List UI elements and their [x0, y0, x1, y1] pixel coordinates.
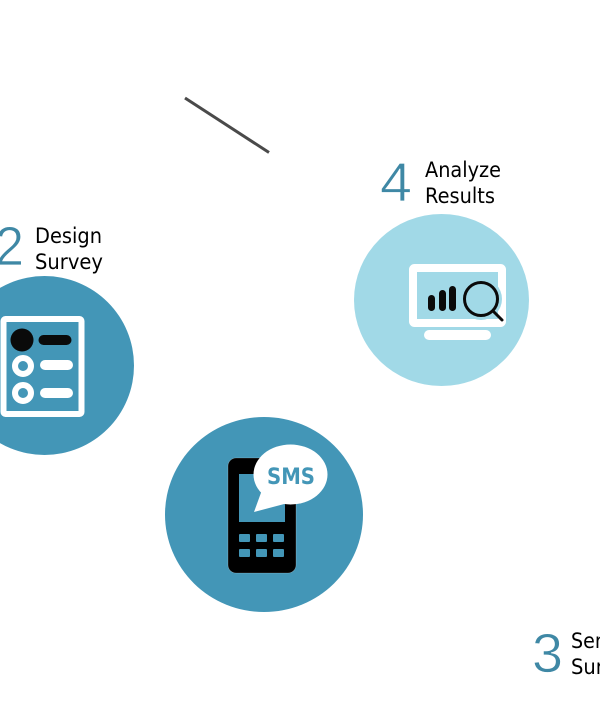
step 1 circle: send SMS	[165, 417, 363, 612]
icon: phone with SMS bubble	[228, 444, 328, 573]
step 4: analyze results	[354, 151, 529, 386]
circle background	[165, 417, 363, 612]
step 4 circle	[354, 214, 529, 386]
step 2 heading: Design	[35, 224, 102, 248]
icon: monitor with chart and magnifier	[413, 268, 502, 340]
connector line	[185, 98, 269, 152]
speech bubble	[254, 444, 328, 504]
step 2 heading second line: Survey	[35, 250, 103, 274]
SMS label: SMS	[267, 465, 315, 490]
step 4 heading: Analyze	[425, 158, 501, 182]
step 2: design survey	[0, 215, 134, 455]
icon: survey form	[4, 319, 82, 414]
step 2 circle	[0, 276, 134, 455]
step 3 number: 3	[532, 622, 563, 684]
step 4 heading second line: Results	[425, 184, 495, 208]
step 4 number: 4	[380, 151, 412, 213]
